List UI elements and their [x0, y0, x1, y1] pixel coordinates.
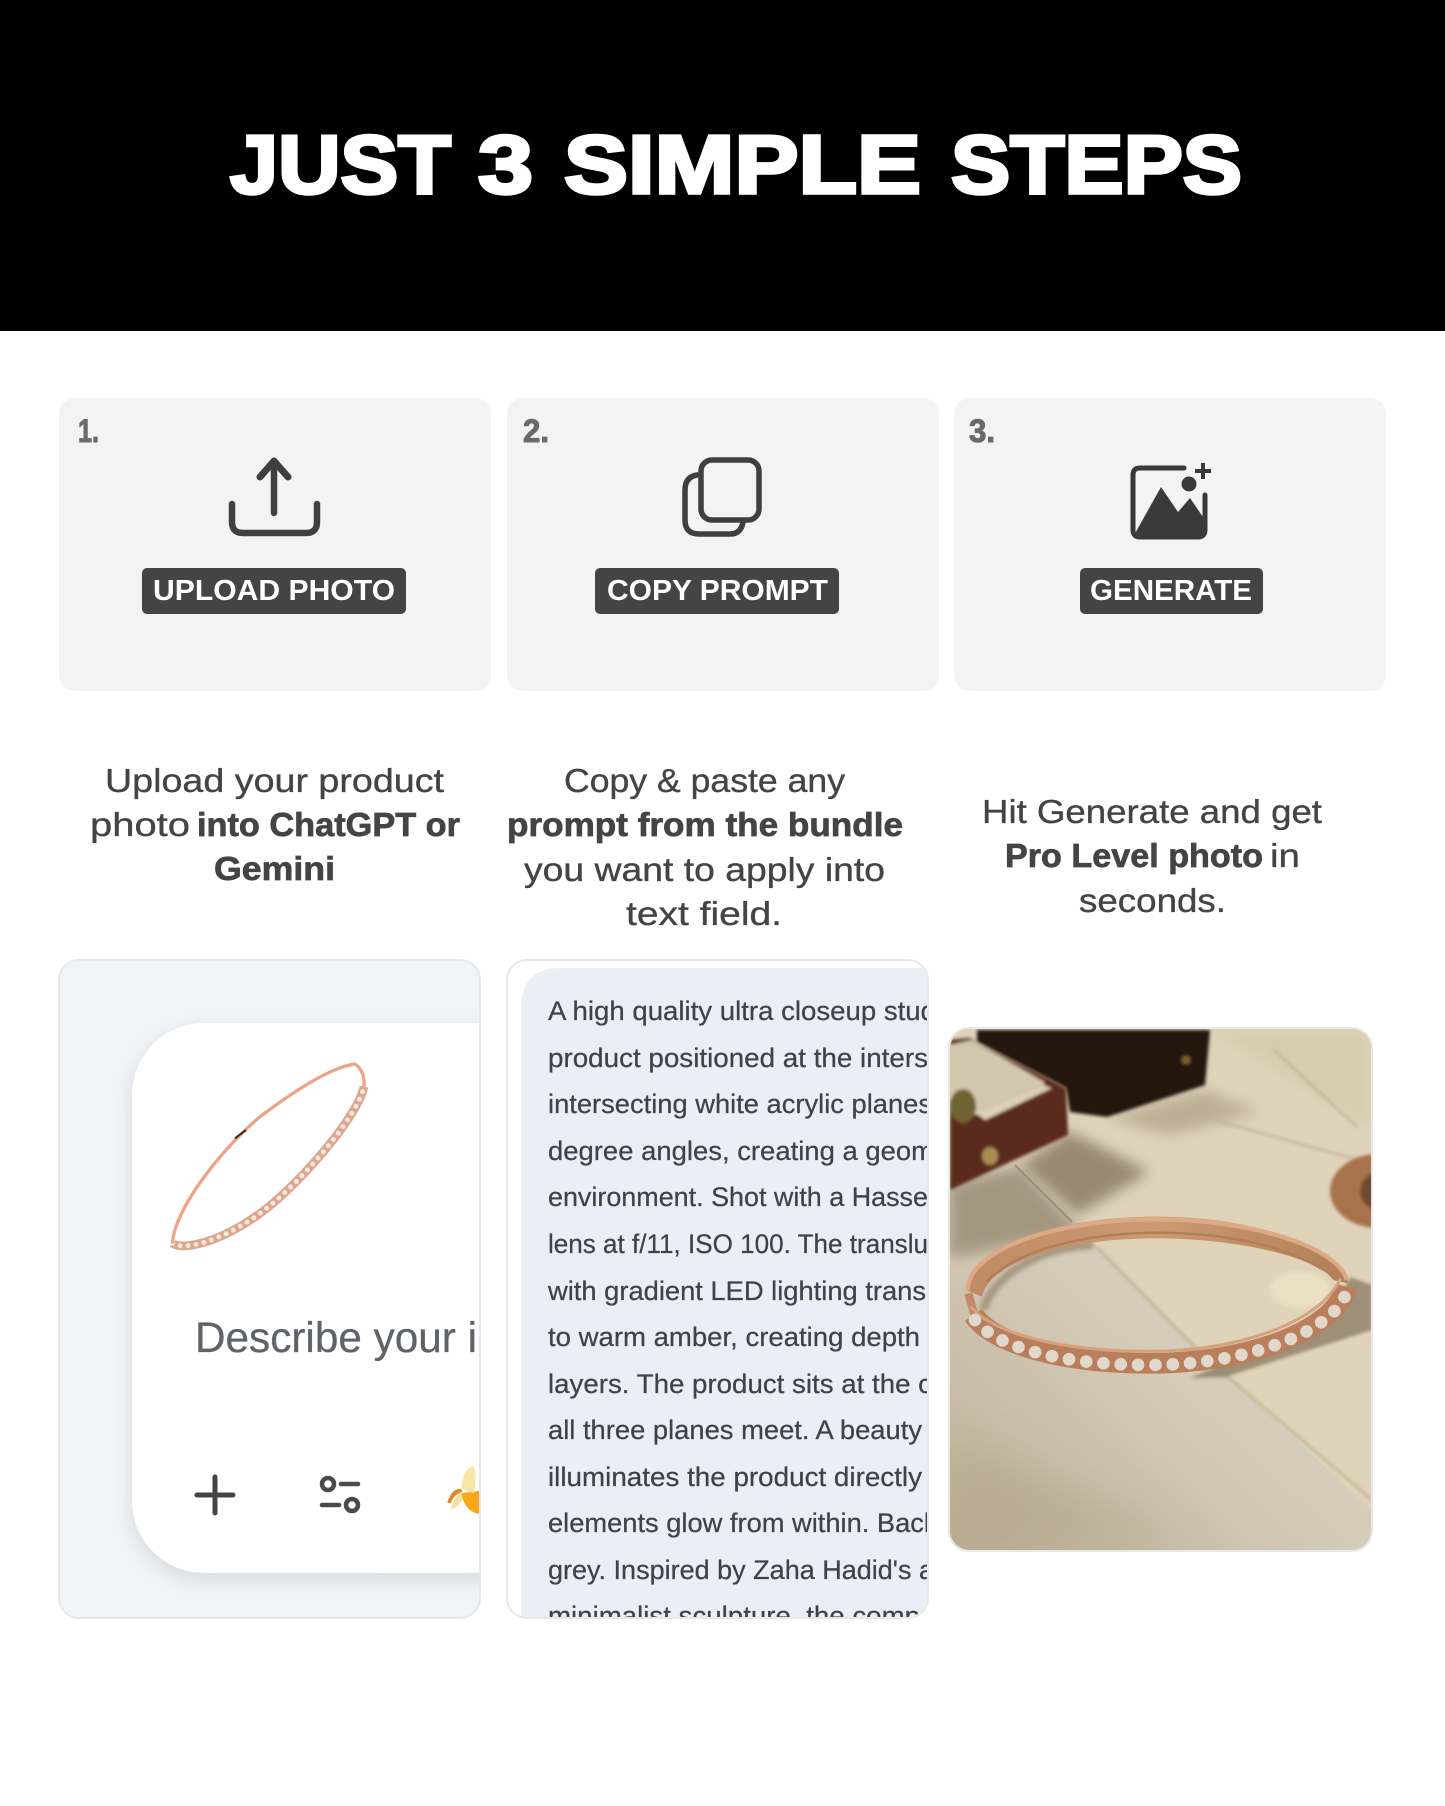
title: JUST: [230, 118, 451, 211]
text block: step 2 description: text field.: [626, 895, 782, 932]
prompt text: layers. The product sits at the c: [548, 1369, 932, 1399]
prompt text: environment. Shot with a Hasse: [548, 1182, 928, 1212]
text block: step 3 description: seconds.: [1079, 882, 1226, 919]
prompt text: grey. Inspired by Zaha Hadid's a: [548, 1555, 935, 1585]
prompt text: illuminates the product directly: [548, 1462, 923, 1492]
prompt text: A high quality ultra closeup stud: [548, 996, 936, 1026]
upload photo label: [142, 568, 406, 614]
prompt input card: [132, 1023, 479, 1573]
icon: plus: [197, 1477, 233, 1513]
upload photo label: UPLOAD PHOTO: [153, 575, 395, 607]
text block: step 3 description: [982, 793, 1322, 919]
text block: step 2 description: Copy & paste any: [564, 762, 846, 799]
panel: step 1 upload photo: [59, 398, 491, 691]
icon: generate image: [1133, 463, 1211, 537]
prompt text: to warm amber, creating depth: [548, 1322, 920, 1352]
step number 3: 3.: [969, 413, 995, 449]
prompt text: with gradient LED lighting trans: [547, 1276, 926, 1306]
fabric: [949, 1166, 1372, 1551]
bronze ring at right: [1328, 1152, 1371, 1230]
panel: generated product photo: [948, 1027, 1373, 1552]
panel: prompt text screenshot: [507, 960, 936, 1631]
prompt text: intersecting white acrylic planes: [548, 1089, 932, 1119]
panel: upload screenshot: [58, 959, 481, 1619]
text block: step 2 description: you want to apply into: [524, 851, 885, 888]
copy prompt label: [595, 568, 839, 614]
dark jewellery box: [977, 1030, 1210, 1117]
bangle product photo: [173, 1064, 364, 1246]
text block: step 1 description: into ChatGPT or: [197, 806, 460, 843]
copy prompt label: COPY PROMPT: [607, 575, 828, 607]
step number 2: 2.: [523, 413, 549, 449]
text block: step 1 description: Upload your product: [105, 762, 444, 799]
bangle shadow: [1190, 1277, 1372, 1378]
generate label: GENERATE: [1090, 575, 1252, 607]
icon: banana: [447, 1466, 480, 1514]
prompt text: all three planes meet. A beauty: [548, 1415, 923, 1445]
prompt text: [547, 996, 936, 1631]
icon: sliders: [322, 1478, 358, 1511]
title: 3: [478, 118, 533, 211]
paper backdrop: [949, 1028, 1372, 1551]
prompt bubble: [521, 968, 928, 1618]
generate label: [1080, 568, 1263, 614]
prompt text: elements glow from within. Bacl: [548, 1508, 930, 1538]
icon: copy: [685, 460, 759, 534]
panel: step 3 generate: [954, 398, 1386, 691]
placeholder text: Describe your i: [195, 1314, 477, 1362]
bangle: [967, 1217, 1348, 1365]
text block: step 1 description: [90, 762, 460, 887]
text block: step 3 description: in: [1270, 837, 1300, 874]
title: SIMPLE: [564, 118, 921, 211]
text block: step 3 description: Hit Generate and get: [982, 793, 1322, 830]
text block: step 2 description: prompt from the bundle: [507, 806, 903, 843]
text block: step 1 description: photo: [90, 806, 190, 843]
ring box: [950, 1038, 1191, 1190]
header band: [0, 0, 1445, 331]
title: STEPS: [951, 118, 1242, 211]
prompt text: product positioned at the inters: [548, 1043, 928, 1073]
text block: step 3 description: Pro Level photo: [1005, 837, 1263, 874]
prompt text: degree angles, creating a geom: [548, 1136, 934, 1166]
icon: upload: [232, 461, 317, 533]
upper right paper folds: [1220, 1034, 1366, 1160]
text block: step 2 description: [507, 762, 903, 932]
prompt text: minimalist sculpture, the comp: [548, 1601, 920, 1631]
soft shadows on paper: [1020, 1090, 1260, 1215]
step number 1: 1.: [78, 413, 99, 449]
prompt text: lens at f/11, ISO 100. The translu: [548, 1229, 928, 1259]
title: [230, 118, 1242, 211]
text block: step 1 description: Gemini: [214, 850, 335, 887]
panel: step 2 copy prompt: [507, 398, 939, 691]
fabric shadow: [949, 1166, 1085, 1256]
